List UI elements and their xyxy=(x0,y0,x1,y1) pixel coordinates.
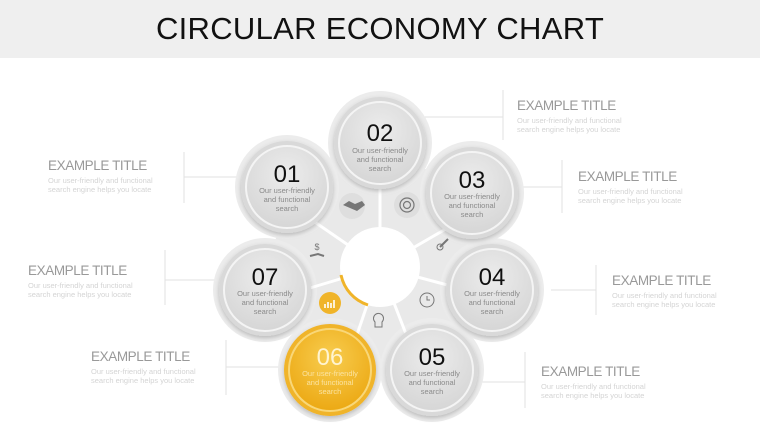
step circles: 07 xyxy=(252,264,278,291)
text block right 4: search engine helps you locate xyxy=(541,391,644,400)
step circles: search xyxy=(421,387,443,396)
header xyxy=(0,0,760,58)
step circles: Our user-friendly xyxy=(259,186,315,195)
step circles: 05 xyxy=(419,344,445,371)
step circles: Our user-friendly xyxy=(302,369,358,378)
text block right 1 xyxy=(517,98,622,134)
text block left 1 xyxy=(48,158,153,194)
step circles: Our user-friendly xyxy=(352,146,408,155)
text block right 4: EXAMPLE TITLE xyxy=(541,364,640,379)
text block left 3: Our user-friendly and functional xyxy=(91,367,196,376)
step circles: search xyxy=(319,387,341,396)
text block right 2: search engine helps you locate xyxy=(578,196,681,205)
step circles: and functional xyxy=(469,298,516,307)
step circles: search xyxy=(276,204,298,213)
step circles: search xyxy=(461,210,483,219)
step circles: Our user-friendly xyxy=(237,289,293,298)
text block left 2: Our user-friendly and functional xyxy=(28,281,133,290)
text block right 2 xyxy=(578,169,683,205)
header: CIRCULAR ECONOMY CHART xyxy=(156,11,604,46)
text block left 1: EXAMPLE TITLE xyxy=(48,158,147,173)
text block left 2 xyxy=(28,263,133,299)
step circles: search xyxy=(481,307,503,316)
step circles: Our user-friendly xyxy=(464,289,520,298)
ring backing xyxy=(213,91,544,422)
step circles: and functional xyxy=(449,201,496,210)
text block right 3: search engine helps you locate xyxy=(612,300,715,309)
step circles: 03 xyxy=(459,167,485,194)
step circles: Our user-friendly xyxy=(444,192,500,201)
text block right 3 xyxy=(612,273,717,309)
text block left 3: search engine helps you locate xyxy=(91,376,194,385)
step circles: search xyxy=(369,164,391,173)
text block right 2: Our user-friendly and functional xyxy=(578,187,683,196)
text block left 2: search engine helps you locate xyxy=(28,290,131,299)
text block right 4: Our user-friendly and functional xyxy=(541,382,646,391)
icons: $ xyxy=(314,242,320,252)
step circles: 06 xyxy=(317,344,343,371)
text block left 1: search engine helps you locate xyxy=(48,185,151,194)
text block left 2: EXAMPLE TITLE xyxy=(28,263,127,278)
step circles xyxy=(219,97,538,416)
step circles: and functional xyxy=(264,195,311,204)
step circles: and functional xyxy=(307,378,354,387)
step circles: 02 xyxy=(367,120,393,147)
step circles: 01 xyxy=(274,161,300,188)
text block left 3: EXAMPLE TITLE xyxy=(91,349,190,364)
step circles: and functional xyxy=(242,298,289,307)
text block right 1: search engine helps you locate xyxy=(517,125,620,134)
text block right 1: Our user-friendly and functional xyxy=(517,116,622,125)
text block right 4 xyxy=(541,364,646,400)
text block right 3: EXAMPLE TITLE xyxy=(612,273,711,288)
text block right 3: Our user-friendly and functional xyxy=(612,291,717,300)
text block left 1: Our user-friendly and functional xyxy=(48,176,153,185)
step circles: 04 xyxy=(479,264,505,291)
step circles: Our user-friendly xyxy=(404,369,460,378)
icons xyxy=(310,192,448,327)
step circles: and functional xyxy=(357,155,404,164)
text block right 2: EXAMPLE TITLE xyxy=(578,169,677,184)
step circles: search xyxy=(254,307,276,316)
step circles: and functional xyxy=(409,378,456,387)
text block left 3 xyxy=(91,349,196,385)
text block right 1: EXAMPLE TITLE xyxy=(517,98,616,113)
